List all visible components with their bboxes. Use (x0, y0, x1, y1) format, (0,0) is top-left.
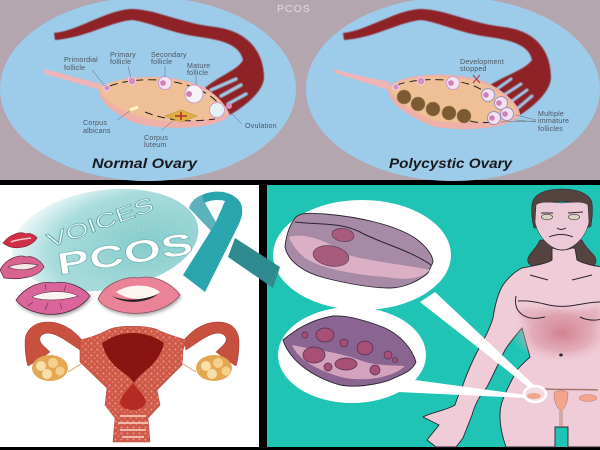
icon: lips 1 (3, 233, 37, 248)
title: polycystic ovary: Polycystic Ovary (389, 155, 513, 171)
label: secondary follicle: Secondary (151, 51, 187, 59)
panel: normal ovary (0, 0, 296, 181)
ovary stalk (44, 69, 102, 90)
label: development stopped: Development (460, 58, 504, 66)
icon: awareness ribbon (183, 192, 280, 292)
text: VOICES: VOICES (44, 194, 157, 253)
leader lines (92, 66, 242, 130)
right fallopian tube (184, 322, 239, 366)
chest shading (518, 307, 600, 328)
corpus albicans (130, 107, 138, 110)
label: development stopped: stopped (460, 65, 487, 73)
uterus wall (80, 326, 186, 442)
callout bubble: polycystic ovary (278, 307, 426, 403)
cysts (331, 227, 355, 243)
label: secondary follicle: follicle (151, 58, 172, 66)
ovarian ligaments (68, 364, 196, 372)
ribbon front strand (183, 192, 242, 292)
face (535, 202, 589, 250)
label: corpus luteum: luteum (144, 141, 166, 149)
ovary body (99, 77, 229, 128)
callout pointer: lower (398, 380, 526, 398)
fallopian tube (54, 9, 264, 115)
belly shading (512, 303, 600, 363)
label: ovulation: Ovulation (245, 122, 277, 130)
label: mature follicle: Mature (187, 62, 210, 70)
panel: voices of PCOS (0, 177, 259, 447)
icon: lips 3 (16, 282, 90, 314)
icon: development stopped cross (473, 75, 480, 83)
ribbon back strand (189, 195, 225, 238)
panel: polycystic ovary (306, 0, 600, 181)
left fallopian tube (25, 322, 82, 366)
icon: lips 4 (98, 277, 180, 313)
label: primordial follicle: follicle (64, 64, 85, 72)
text: PCOS: PCOS (55, 226, 195, 282)
label: mature follicle: follicle (187, 69, 208, 77)
callout target: ovary (524, 386, 546, 402)
panel: body illustration (267, 185, 600, 447)
cysts (302, 328, 398, 375)
left ovary (32, 355, 68, 381)
ovary inner section (289, 236, 430, 279)
lower cavity (120, 383, 146, 410)
heading: PCOS: PCOS (277, 3, 311, 15)
uterine cavity (102, 333, 164, 383)
hair top (532, 189, 592, 228)
ovary inner section (292, 345, 405, 379)
chest lines (516, 275, 600, 320)
leader lines (501, 115, 536, 122)
ovary stalk (334, 69, 390, 90)
navel (559, 354, 563, 356)
label: primary follicle: Primary (110, 51, 136, 59)
text: OF: OF (136, 222, 152, 236)
follicle path (110, 80, 222, 121)
label: multiple immature follicles: immature (538, 117, 569, 125)
follicles (104, 76, 232, 118)
label: corpus albicans: Corpus (83, 119, 107, 127)
ovary body (388, 75, 520, 129)
label: multiple immature follicles: follicles (538, 125, 563, 133)
cervix (118, 416, 148, 437)
cysts (397, 90, 471, 123)
callout bubble: healthy ovary (273, 200, 451, 310)
corpus luteum (165, 110, 197, 122)
teal glow (5, 177, 205, 303)
woman figure (423, 189, 600, 447)
right ovary (196, 355, 232, 381)
label: primordial follicle: Primordial (64, 56, 98, 64)
ribbon tail (228, 238, 280, 288)
uterus (25, 322, 239, 442)
label: corpus albicans: albicans (83, 127, 111, 135)
title: normal ovary: Normal Ovary (92, 155, 198, 171)
label: multiple immature follicles: Multiple (538, 110, 564, 118)
immature follicles (393, 76, 514, 124)
panel: ovary comparison (0, 0, 600, 181)
small uterus (545, 389, 598, 427)
follicle path (397, 80, 492, 123)
callout pointer: upper (420, 292, 537, 390)
fallopian tube (343, 9, 551, 115)
lower hair (528, 240, 596, 267)
facial features (541, 212, 583, 250)
body and arm (423, 248, 600, 447)
label: primary follicle: follicle (110, 58, 131, 66)
label: corpus luteum: Corpus (144, 134, 168, 142)
icon: lips 2 (0, 256, 44, 279)
